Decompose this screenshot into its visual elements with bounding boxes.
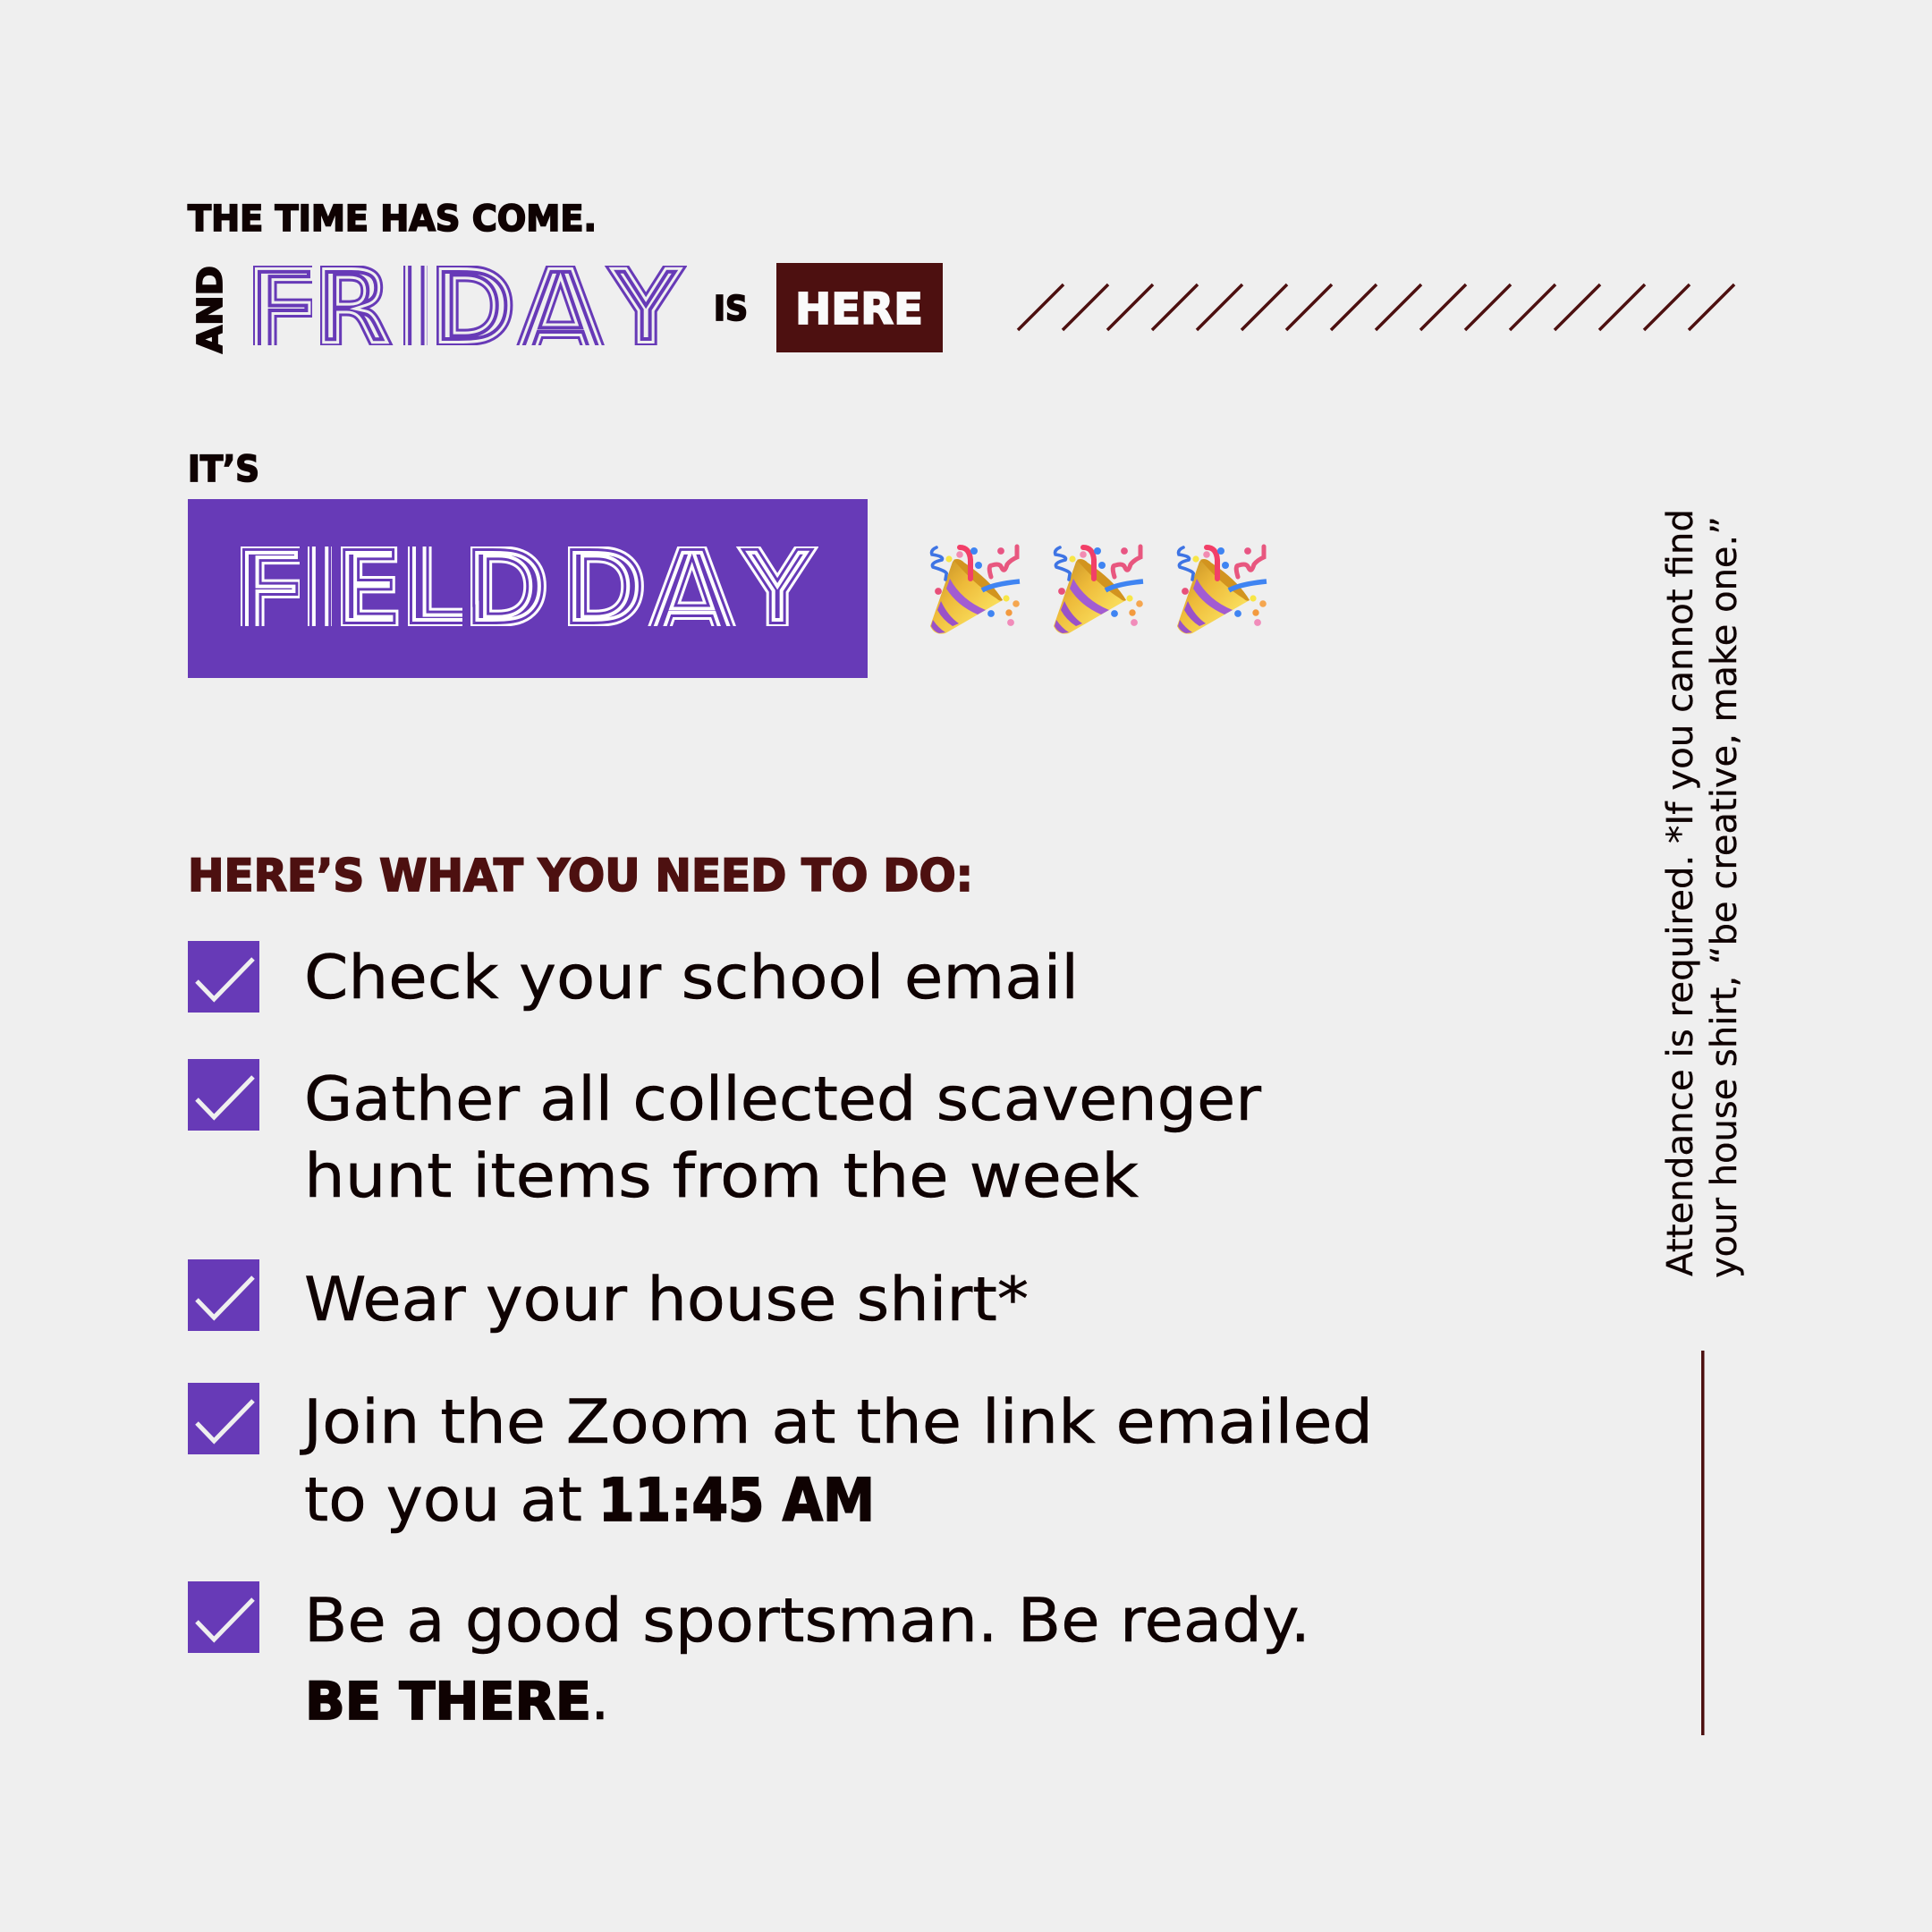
title word: FRIDAY striped: D [428, 244, 518, 371]
label: IS: IS [714, 289, 748, 328]
banner: FIELD DAY: D [461, 525, 551, 652]
title word: FRIDAY striped: A [513, 242, 607, 384]
title word: FRIDAY striped: R [310, 244, 394, 371]
banner: FIELD DAY: I [295, 510, 345, 667]
banner: FIELD DAY: L [397, 514, 474, 656]
banner: FIELD DAY: E [331, 525, 405, 652]
checklist item 5: Be a good sportsman. Be ready. [304, 1586, 1310, 1657]
banner: FIELD DAY: F [229, 523, 312, 665]
banner: FIELD DAY: D [558, 525, 648, 652]
title word: FRIDAY striped: F [242, 242, 325, 384]
label: AND rotated: AND [191, 266, 230, 353]
banner: FIELD DAY: A [645, 523, 739, 665]
icon: party popper 1 [930, 547, 1020, 634]
checklist item 1: Check your school email [304, 943, 1079, 1013]
title word: FRIDAY striped: I [391, 229, 441, 386]
banner: FIELD DAY: I [295, 510, 345, 667]
checklist item 5: . [590, 1664, 610, 1734]
checklist item 4: 11:45 AM [598, 1466, 875, 1535]
checklist item 4 [188, 1383, 1373, 1536]
icon: party popper 3 [1177, 547, 1267, 634]
title word: FRIDAY striped: R [310, 244, 394, 371]
checklist item 5: BE THERE [305, 1671, 591, 1732]
banner: FIELD DAY: F [229, 523, 312, 665]
banner: FIELD DAY: L [397, 514, 474, 656]
title word: FRIDAY striped: D [428, 244, 518, 371]
title word: FRIDAY striped: F [242, 242, 325, 384]
label: IT'S: IT’S [188, 449, 259, 490]
side note: attendance rotated text [1660, 509, 1745, 1278]
title word: FRIDAY striped: F [242, 242, 325, 384]
banner: FIELD DAY: D [558, 525, 648, 652]
title word: FRIDAY striped [253, 266, 687, 345]
banner: FIELD DAY: Y [736, 525, 818, 652]
badge: HERE [776, 263, 943, 352]
banner: FIELD DAY [188, 499, 868, 678]
banner: FIELD DAY: E [331, 525, 405, 652]
banner: FIELD DAY: L [397, 514, 474, 656]
vertical rule [1701, 1351, 1705, 1735]
heading: the time has come: THE TIME HAS COME. [188, 199, 597, 240]
title word: FRIDAY striped: A [513, 242, 607, 384]
banner: FIELD DAY: D [461, 525, 551, 652]
title word: FRIDAY striped: A [513, 242, 607, 384]
banner: FIELD DAY: A [645, 523, 739, 665]
badge: HERE: HERE [795, 284, 923, 335]
heading: what you need to do: HERE’S WHAT YOU NEED TO DO: [188, 850, 973, 902]
side note: attendance rotated text: your house shirt, “be creative, make one.” [1704, 516, 1745, 1278]
decorative slashes row [1018, 284, 1734, 330]
side note: attendance rotated text: Attendance is required. *If you cannot find [1660, 509, 1701, 1276]
title word: FRIDAY striped: Y [605, 244, 687, 371]
title word: FRIDAY striped: R [310, 244, 394, 371]
title word: FRIDAY striped: D [428, 244, 518, 371]
title word: FRIDAY striped: I [391, 229, 441, 386]
banner: FIELD DAY: I [295, 510, 345, 667]
checklist item 2: hunt items from the week [304, 1141, 1140, 1212]
banner: FIELD DAY: Y [736, 525, 818, 652]
checklist item 4: to you at [304, 1465, 582, 1536]
checklist item 2: Gather all collected scavenger [304, 1064, 1261, 1135]
title word: FRIDAY striped: Y [605, 244, 687, 371]
banner: FIELD DAY: Y [736, 525, 818, 652]
checklist item 3: Wear your house shirt* [304, 1265, 1029, 1335]
checklist item 5 [188, 1581, 1310, 1734]
checklist item 4: Join the Zoom at the link emailed [300, 1387, 1373, 1458]
title word: FRIDAY striped: I [391, 229, 441, 386]
title word: FRIDAY striped: Y [605, 244, 687, 371]
banner: FIELD DAY: E [331, 525, 405, 652]
banner: FIELD DAY: D [461, 525, 551, 652]
icon: party popper 2 [1054, 547, 1143, 634]
banner: FIELD DAY: F [229, 523, 312, 665]
banner: FIELD DAY: A [645, 523, 739, 665]
checklist item 2 [188, 1059, 1261, 1212]
banner: FIELD DAY: D [558, 525, 648, 652]
